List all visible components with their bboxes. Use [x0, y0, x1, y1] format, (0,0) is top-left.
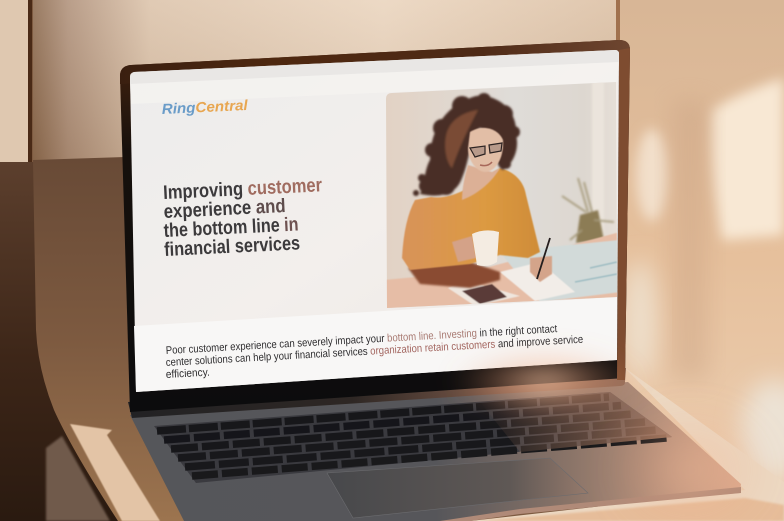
body paragraph: efficiency.: [165, 367, 210, 381]
laptop base front edge: [440, 487, 741, 521]
keyboard key rows: [157, 397, 668, 476]
logo: RingCentral: [161, 98, 249, 118]
writing hand: [530, 256, 552, 282]
table and papers: [384, 232, 620, 312]
sweater: [402, 168, 540, 270]
photo: woman writing with coffee: [384, 80, 620, 312]
headline: [163, 174, 323, 261]
hair: [413, 93, 520, 196]
hand on cup: [452, 236, 476, 262]
plant: [562, 178, 614, 243]
sunlight glare: [450, 348, 770, 521]
laptop screen: [130, 50, 620, 392]
headline: financial services: [164, 232, 301, 261]
footer panel: [134, 297, 617, 392]
background: right wall with sunlight: [600, 0, 784, 521]
laptop base deck: [130, 382, 741, 521]
trackpad: [327, 458, 588, 518]
hinge: [128, 368, 626, 418]
background: dark lower wall panels: [0, 157, 192, 521]
body paragraph: [165, 323, 584, 381]
keyboard: [154, 392, 672, 483]
background: upper wood wall: [0, 0, 620, 330]
glasses: [470, 143, 502, 157]
lap shadow: [408, 262, 500, 288]
headline: the bottom line in: [163, 213, 299, 242]
screen top bar: [130, 50, 619, 84]
body paragraph: Poor customer experience can severely impact your bottom line. Investing in the right contact: [165, 323, 558, 357]
headline: experience and: [163, 195, 286, 223]
neck: [462, 165, 500, 200]
desk surface with light stripe: [70, 368, 784, 521]
headline: Improving customer: [163, 174, 323, 204]
laptop: [120, 40, 741, 521]
body paragraph: center solutions can help your financial services organization retain customers and improve service: [165, 334, 584, 369]
laptop lid: [120, 40, 630, 412]
smile: [480, 162, 492, 166]
face: [468, 128, 503, 172]
pen: [537, 238, 550, 279]
coffee cup: [472, 230, 499, 266]
